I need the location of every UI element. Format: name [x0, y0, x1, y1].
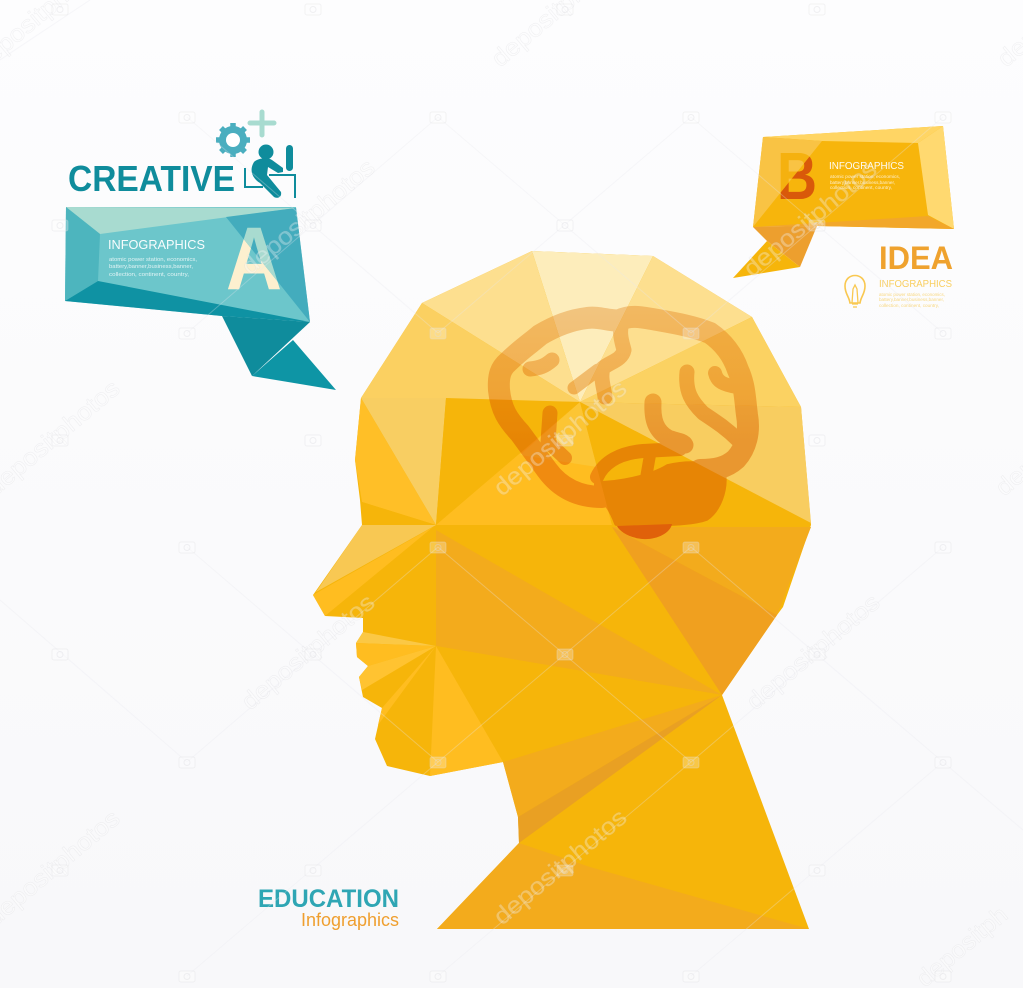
- callout B text: collection, continent, country,: [830, 185, 892, 190]
- letter A: A: [226, 208, 282, 308]
- panel: callout B: [733, 126, 954, 278]
- text block: idea infographics: atomic power station, economics,: [879, 292, 945, 297]
- person head with low-poly facets: [313, 251, 811, 929]
- callout A text: collection, continent, country,: [109, 272, 190, 278]
- letter B: B: [777, 139, 817, 214]
- icon: plus: [250, 112, 274, 135]
- callout A text: battery,banner,business,banner,: [109, 264, 194, 270]
- callout B text: INFOGRAPHICS: [829, 160, 904, 172]
- title: EDUCATION: EDUCATION: [258, 885, 399, 913]
- callout A tail: [222, 316, 336, 390]
- text block: idea infographics: battery,banner,business,banner,: [879, 297, 944, 302]
- brain icon: [499, 317, 748, 523]
- text block: idea infographics: [879, 278, 952, 308]
- callout B tail: [733, 226, 817, 278]
- icon: light bulb: [845, 276, 865, 307]
- heading: CREATIVE: CREATIVE: [68, 158, 235, 199]
- icon: gear: [216, 123, 250, 157]
- mouth and chin facets: [356, 632, 503, 776]
- callout A text: INFOGRAPHICS: [108, 237, 205, 252]
- brain stem: [617, 524, 672, 539]
- nose facets: [313, 525, 436, 616]
- watermark overlay: depositphotos: [742, 589, 885, 716]
- letter B: [780, 153, 814, 199]
- letter A: A: [226, 208, 282, 308]
- letter B: B: [777, 139, 817, 214]
- text block: idea infographics: collection, continent, country,: [879, 303, 939, 308]
- watermark overlay: depositphotos: [489, 375, 632, 502]
- callout A text: [108, 237, 205, 278]
- watermark overlay: depositphotos: [489, 804, 632, 931]
- letter A: [228, 228, 280, 290]
- text block: idea infographics: INFOGRAPHICS: [879, 278, 952, 290]
- watermark overlay: depositphotos: [237, 154, 380, 281]
- icon: person at desk: [245, 144, 295, 198]
- watermark overlay: depositphotos: [739, 156, 882, 283]
- subtitle: Infographics: Infographics: [301, 910, 399, 930]
- panel: callout A: [65, 207, 336, 390]
- callout A text: atomic power station, economics,: [109, 257, 197, 263]
- callout B text: battery,banner,business,banner,: [830, 180, 895, 185]
- callout B text: [829, 160, 904, 190]
- watermark overlay: depositphotos: [237, 589, 380, 716]
- callout B text: atomic power station, economics,: [830, 174, 900, 179]
- heading: IDEA: IDEA: [879, 240, 953, 276]
